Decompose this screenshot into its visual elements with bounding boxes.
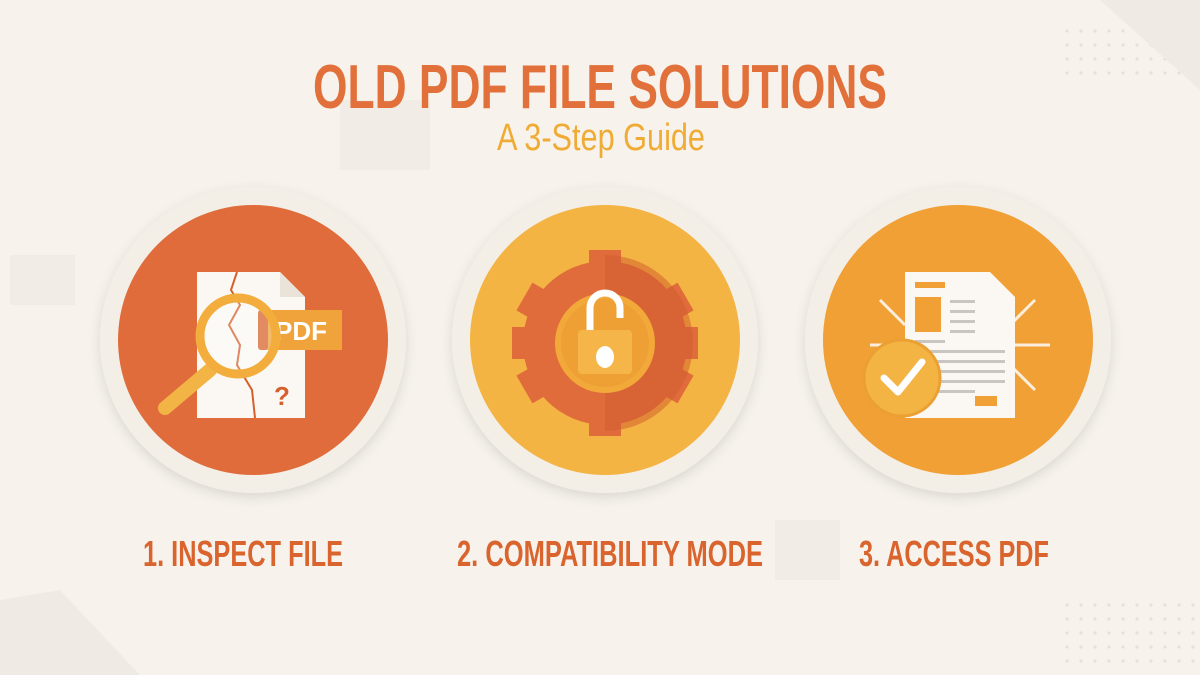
icon: gear [512,250,698,436]
panel: step 1 icon [100,187,406,493]
label: step 1: 1. INSPECT FILE [143,533,343,574]
title: OLD PDF FILE SOLUTIONS [313,53,887,122]
icon: question mark: ? [274,381,290,411]
icon: document [905,272,1015,418]
icon: magnifier [165,298,276,408]
icon: check badge [864,340,940,416]
subtitle: A 3-Step Guide [497,117,705,159]
icon: rays [870,300,1050,390]
label: step 3: 3. ACCESS PDF [859,533,1049,574]
panel: step 3 icon [805,187,1111,493]
panel: step 2 icon [452,187,758,493]
label: step 2: 2. COMPATIBILITY MODE [457,533,763,574]
icon: PDF tag [258,310,342,350]
icon: cracked document [165,272,342,418]
icon: PDF tag: PDF [275,316,327,346]
icon: padlock [578,293,632,374]
